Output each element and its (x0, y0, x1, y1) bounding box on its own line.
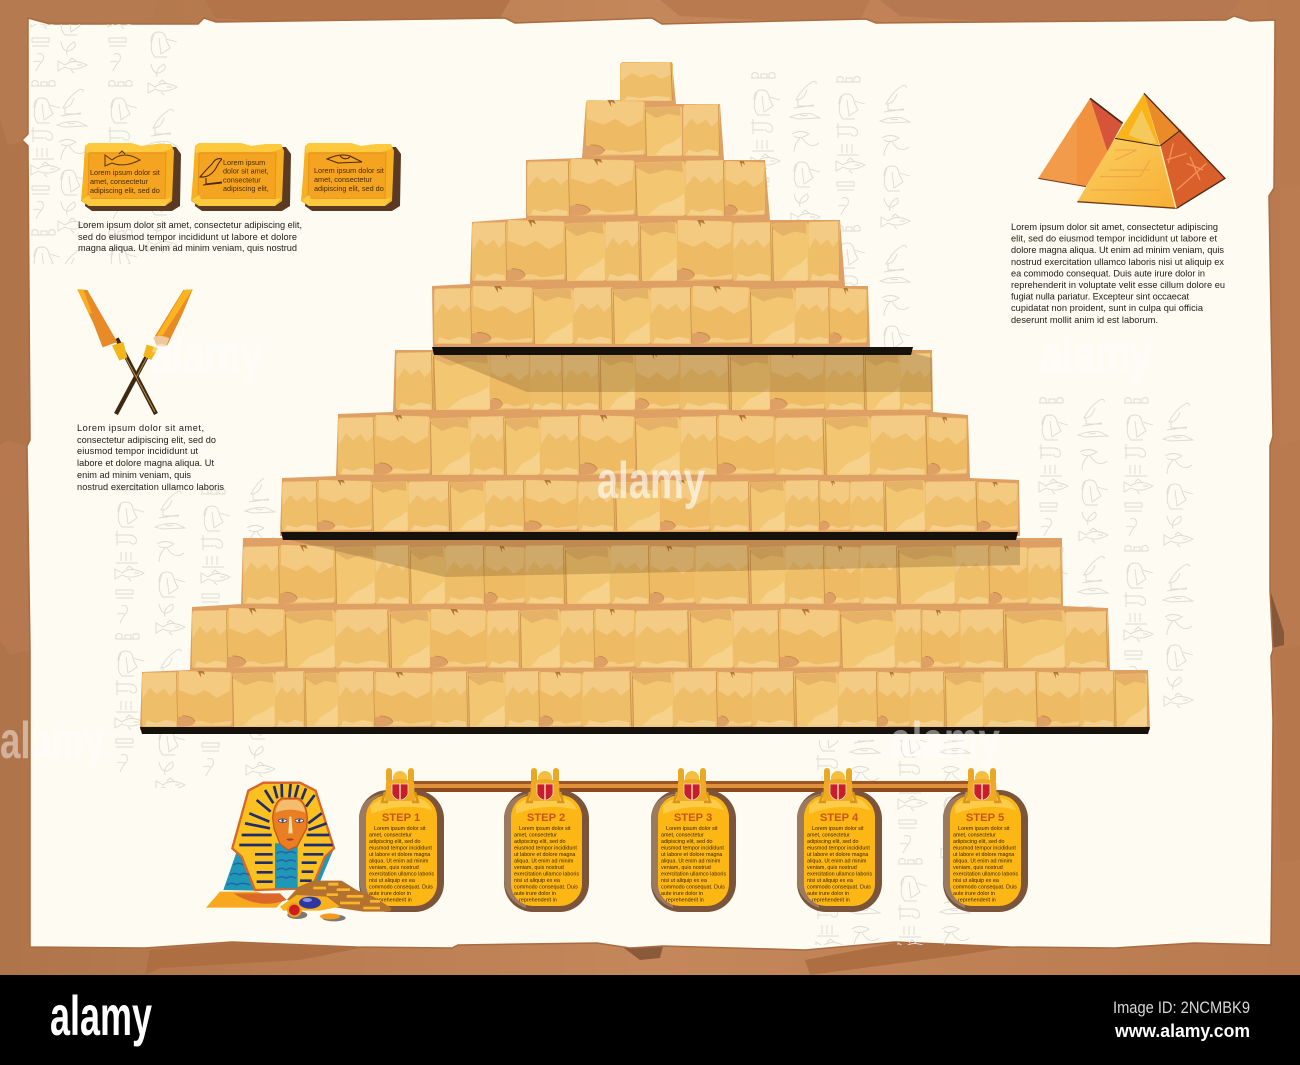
step 2 (504, 768, 589, 912)
step 4: nisi ut aliquip ex ea (807, 878, 853, 884)
icon: scarab 3 (674, 768, 710, 802)
step 2: nisi ut aliquip ex ea (514, 878, 560, 884)
watermark: lower left: alamy (0, 712, 104, 770)
image id: Image ID: 2NCMBK9 (1113, 998, 1250, 1017)
step 5: STEP 5 (966, 812, 1004, 824)
hieroglyph background: top right of pyramid (750, 72, 912, 347)
paragraph: right column: Lorem ipsum dolor sit amet, consectetur adipiscing (1011, 222, 1218, 232)
step 1: commodo consequat. Duis (369, 884, 433, 890)
stone tablets with captions (81, 143, 401, 211)
step 3: eiusmod tempor incididunt (661, 846, 724, 852)
step 4: commodo consequat. Duis (807, 884, 871, 890)
step 4: exercitation ullamco laboris (807, 872, 872, 878)
step 5: veniam, quis nostrud (953, 865, 1003, 871)
step 1: aliqua. Ut enim ad minim (369, 858, 429, 864)
paragraph: right column: elit, sed do eiusmod tempor incididunt ut labore et (1011, 234, 1217, 244)
tablet: fish: amet, consectetur (90, 177, 149, 186)
step 3: commodo consequat. Duis (661, 884, 725, 890)
mortar base (140, 62, 1150, 730)
course 3 (472, 220, 840, 281)
tablet: eye (301, 143, 401, 211)
step 2: adipiscing elit, sed do (514, 839, 566, 845)
tablet: bird: consectetur (223, 176, 261, 184)
step 3: aute irure dolor in (661, 891, 703, 897)
step 4: ut labore et dolore magna (807, 852, 868, 858)
step 4: aute irure dolor in (807, 891, 849, 897)
watermark: lower right: alamy (890, 712, 1000, 770)
step 1: exercitation ullamco laboris (369, 872, 434, 878)
watermark: upper left: alamy (150, 326, 262, 384)
step 3: ut labore et dolore magna (661, 852, 722, 858)
course 8 (243, 545, 1062, 604)
hieroglyph background: top left (30, 24, 178, 264)
step 4: amet, consectetur (807, 832, 850, 838)
hieroglyph background: right side (1039, 398, 1193, 708)
tablet: bird: Lorem ipsum (223, 158, 265, 167)
step 2: aliqua. Ut enim ad minim (514, 858, 574, 864)
step 3: aliqua. Ut enim ad minim (661, 858, 721, 864)
step 5: Lorem ipsum dolor sit (958, 826, 1010, 832)
step 3: reprehenderit in (666, 898, 704, 904)
paragraph: under spears: labore et dolore magna aliqua. Ut (77, 458, 214, 468)
paragraph: right column: deserunt mollit anim id est laborum. (1011, 315, 1158, 325)
icon: scarab 2 (527, 768, 563, 802)
ledge line 1 (432, 347, 913, 355)
course 2 (527, 159, 765, 216)
icon: scarab 4 (820, 768, 856, 802)
step 5: reprehenderit in (958, 898, 996, 904)
ledge line 2 (281, 532, 1018, 540)
step 2: STEP 2 (527, 812, 565, 824)
course 6 (338, 415, 967, 475)
course 1 (586, 100, 720, 156)
timeline bar (400, 781, 985, 792)
step 5: adipiscing elit, sed do (953, 839, 1005, 845)
paragraph: right column: ea commodo consequat. Duis aute irure dolor in (1011, 268, 1205, 278)
tablet: eye: Lorem ipsum dolor sit (314, 166, 384, 175)
step 5: nisi ut aliquip ex ea (953, 878, 999, 884)
paragraph: under spears: enim ad minim veniam, quis (77, 470, 191, 480)
tablet: fish (81, 143, 181, 211)
step 4: eiusmod tempor incididunt (807, 846, 870, 852)
step 1: Lorem ipsum dolor sit (374, 826, 426, 832)
paragraph: under spears: consectetur adipiscing elit, sed do (77, 435, 216, 445)
icon: two pyramids (1038, 93, 1225, 208)
paragraph: under spears: eiusmod tempor incididunt ut (77, 446, 198, 456)
shadow under middle section (290, 540, 1020, 577)
course 5 (396, 352, 932, 410)
paragraph: right column: cupidatat non proident, sunt in culpa qui officia (1011, 303, 1204, 313)
tablet: eye: adipiscing elit, sed do (314, 184, 384, 193)
tablet: bird: dolor sit amet, (223, 166, 269, 176)
step 1: aute irure dolor in (369, 891, 411, 897)
watermark: upper right: alamy (1040, 326, 1152, 384)
step 2: exercitation ullamco laboris (514, 872, 579, 878)
watermark: centre: alamy (597, 452, 705, 510)
course 4 (434, 286, 867, 344)
step 1: nisi ut aliquip ex ea (369, 878, 415, 884)
step 1: adipiscing elit, sed do (369, 839, 421, 845)
step 2: eiusmod tempor incididunt (514, 846, 577, 852)
step 1: eiusmod tempor incididunt (369, 846, 432, 852)
step 3: STEP 3 (674, 812, 712, 824)
course 7 (282, 480, 1018, 531)
tablet: eye: amet, consectetur (314, 175, 373, 184)
step 5 (943, 768, 1028, 912)
step 1: veniam, quis nostrud (369, 865, 419, 871)
step 2: ut labore et dolore magna (514, 852, 575, 858)
paragraph: under spears: nostrud exercitation ullamco laboris (77, 482, 224, 492)
step 3: veniam, quis nostrud (661, 865, 711, 871)
paragraph: right column: dolore magna aliqua. Ut enim ad minim veniam, quis (1011, 245, 1224, 255)
pharaoh bust with treasure (206, 783, 392, 921)
step 3: amet, consectetur (661, 832, 704, 838)
footer logo: alamy (50, 984, 152, 1047)
step 2: veniam, quis nostrud (514, 865, 564, 871)
step 1: amet, consectetur (369, 832, 412, 838)
hieroglyph background: left side (115, 475, 275, 793)
step 4: Lorem ipsum dolor sit (812, 826, 864, 832)
course 10 (142, 671, 1147, 727)
step 5: eiusmod tempor incididunt (953, 846, 1016, 852)
black footer (0, 975, 1300, 1065)
paragraph: right column: reprehenderit in voluptate velit esse cillum dolore eu (1011, 280, 1225, 290)
step 1 (359, 768, 444, 912)
step 1: ut labore et dolore magna (369, 852, 430, 858)
step 4 (797, 768, 882, 912)
icon: scarab 5 (964, 768, 1000, 802)
shadow under upper section (437, 353, 932, 392)
paragraph: right column: nostrud exercitation ullamco laboris nisi ut aliquip ex (1011, 257, 1224, 267)
step 5: exercitation ullamco laboris (953, 872, 1018, 878)
step 3: adipiscing elit, sed do (661, 839, 713, 845)
step 4: veniam, quis nostrud (807, 865, 857, 871)
step 2: reprehenderit in (519, 898, 557, 904)
tablet: bird (191, 143, 291, 211)
paragraph: under spears: Lorem ipsum dolor sit amet, (77, 423, 204, 433)
step 4: adipiscing elit, sed do (807, 839, 859, 845)
step 3: nisi ut aliquip ex ea (661, 878, 707, 884)
step 4: STEP 4 (820, 812, 859, 824)
step 2: aute irure dolor in (514, 891, 556, 897)
step 5: aliqua. Ut enim ad minim (953, 858, 1013, 864)
step 3: Lorem ipsum dolor sit (666, 826, 718, 832)
paragraph: under tablets: sed do eiusmod tempor incididunt ut labore et dolore (78, 232, 297, 242)
paragraph: under tablets: Lorem ipsum dolor sit amet, consectetur adipiscing elit, (78, 220, 302, 230)
step 4: reprehenderit in (812, 898, 850, 904)
top block (620, 62, 673, 101)
step 5: commodo consequat. Duis (953, 884, 1017, 890)
step 3 (651, 768, 736, 912)
step 2: Lorem ipsum dolor sit (519, 826, 571, 832)
icon: scarab 1 (382, 768, 418, 802)
paragraph: right column: fugiat nulla pariatur. Excepteur sint occaecat (1011, 292, 1189, 302)
step 5: ut labore et dolore magna (953, 852, 1014, 858)
paragraph: under tablets: magna aliqua. Ut enim ad minim veniam, quis nostrud (78, 243, 297, 253)
ledge line 3 (140, 727, 1150, 734)
step 2: commodo consequat. Duis (514, 884, 578, 890)
step 2: amet, consectetur (514, 832, 557, 838)
tablet: fish: Lorem ipsum dolor sit (90, 168, 160, 177)
step 1: reprehenderit in (374, 898, 412, 904)
step 5: aute irure dolor in (953, 891, 995, 897)
hieroglyph background: bottom right (816, 740, 972, 945)
step 1: STEP 1 (382, 812, 420, 824)
step 5: amet, consectetur (953, 832, 996, 838)
website: www.alamy.com (1114, 1021, 1250, 1041)
step 4: aliqua. Ut enim ad minim (807, 858, 867, 864)
course 9 (192, 608, 1108, 668)
step 3: exercitation ullamco laboris (661, 872, 726, 878)
tablet: fish: adipiscing elit, sed do (90, 186, 160, 195)
icon: crossed spears (77, 289, 193, 414)
stepped stone pyramid (140, 62, 1150, 734)
tablet: bird: adipiscing elit, (223, 184, 269, 193)
